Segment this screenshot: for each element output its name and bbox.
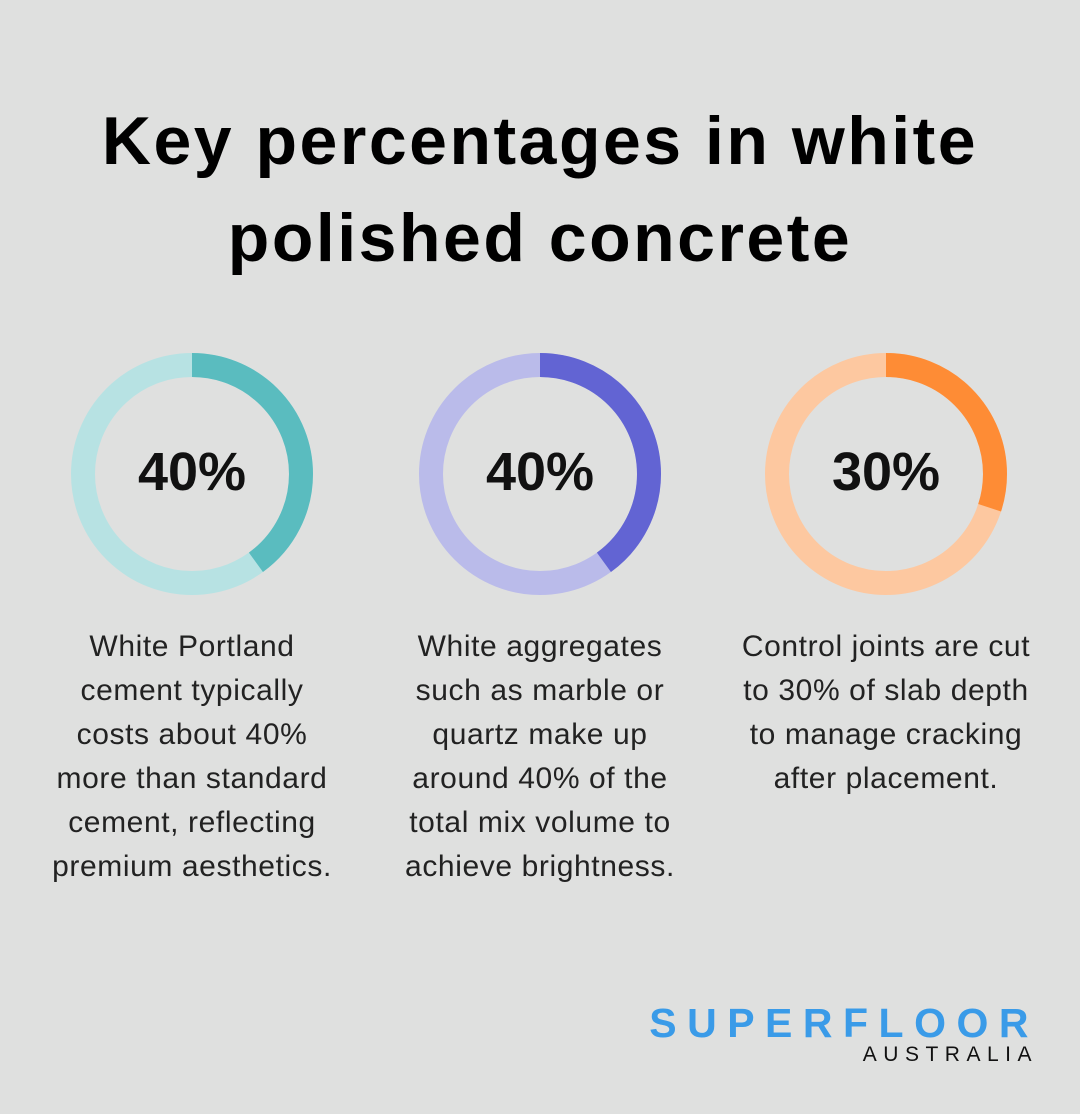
description 2 (405, 630, 675, 883)
description 2: such as marble or (416, 674, 664, 707)
logo: AUSTRALIA (863, 1043, 1038, 1066)
title (102, 103, 978, 276)
description 1: cement, reflecting (68, 806, 316, 839)
donut 2 (419, 353, 661, 595)
description 2: quartz make up (432, 718, 648, 751)
value 3: 30% (832, 442, 940, 502)
description 2: White aggregates (418, 630, 662, 663)
description 1: premium aesthetics. (52, 850, 332, 883)
donut 3 (765, 353, 1007, 595)
description 2: achieve brightness. (405, 850, 675, 883)
description 1: more than standard (57, 762, 327, 795)
description 3 (742, 630, 1030, 795)
donut 1 (71, 353, 313, 595)
logo (649, 1000, 1039, 1066)
value 2: 40% (486, 442, 594, 502)
description 1: costs about 40% (77, 718, 307, 751)
description 2: around 40% of the (412, 762, 668, 795)
logo: SUPERFLOOR (649, 1000, 1039, 1046)
title: polished concrete (228, 200, 852, 276)
title: Key percentages in white (102, 103, 978, 179)
description 3: to 30% of slab depth (743, 674, 1029, 707)
description 2: total mix volume to (409, 806, 671, 839)
description 3: after placement. (774, 762, 998, 795)
description 1 (52, 630, 332, 883)
description 1: cement typically (80, 674, 304, 707)
description 3: to manage cracking (750, 718, 1022, 751)
description 3: Control joints are cut (742, 630, 1030, 663)
value 1: 40% (138, 442, 246, 502)
description 1: White Portland (89, 630, 295, 663)
